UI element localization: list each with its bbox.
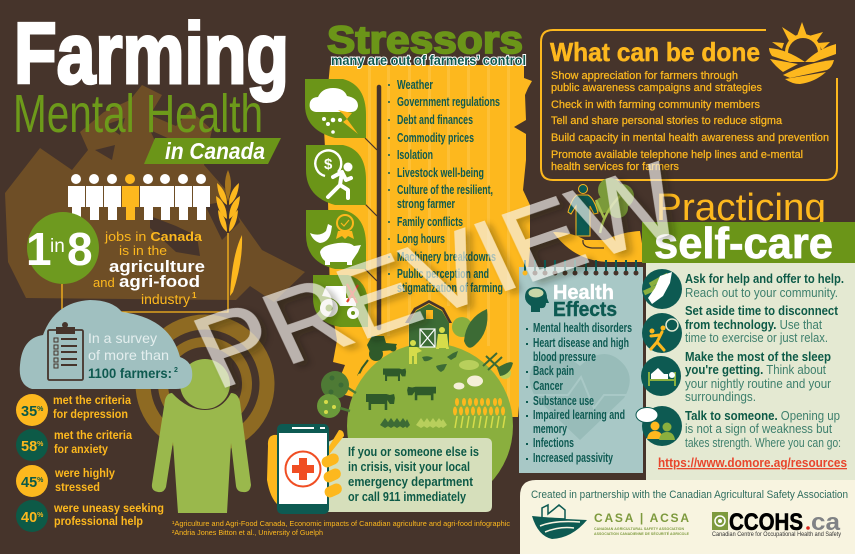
farmers [409,327,449,364]
panel: health effects: Back pain [533,363,574,378]
spiral binding [522,260,638,276]
logo: CASA: ASSOCIATION CANADIENNE DE SÉCURITÉ AGRICOLE [594,531,690,536]
stat: 45% stressed: 45 [21,475,37,491]
panel: health effects: Effects [553,299,617,321]
icon: wheat [216,170,242,296]
text: jobs in Canada: agriculture [109,257,205,276]
callout: crisis: in crisis, visit your local [348,459,470,474]
timeline bar [365,87,379,328]
stat: 40% uneasy: % [37,512,44,519]
panel: self-care tips: Talk to someone. Opening up [685,408,840,423]
icon leaf: livestock [306,210,366,269]
icon: clipboard [48,322,83,380]
stat: 1 in 8 circle: 8 [67,223,93,275]
footnotes: ¹Agriculture and Agri-Food Canada, Economic impacts of Canadian agriculture and agri-food infographic [172,519,510,528]
logo: CCOHS [712,509,842,538]
text: jobs in Canada: agri-food [119,272,200,291]
panel: self-care tips: you're getting. Think about [685,362,826,377]
text: jobs in Canada: and [93,275,115,290]
stat: 58% anxiety [16,428,132,461]
stressors list: Weather [397,77,433,92]
panel: health effects: Mental health disorders [533,320,632,335]
cows [366,369,436,410]
text: jobs in Canada: jobs in Canada [104,229,203,244]
stat: 45% stressed: stressed [55,480,100,494]
stressors list: Commodity prices [397,130,474,145]
panel: self-care tips: Make the most of the sleep [685,349,831,364]
footnotes [172,519,510,537]
panel: self-care tips: from technology. Use that [685,317,822,332]
map of Canada [5,85,305,302]
stat: 40% uneasy: professional help [54,514,143,528]
stat: 1 in 8 circle: 1 [26,223,52,275]
icon: head [525,287,549,312]
panel: health effects: Infections [533,435,574,450]
hill [347,343,513,509]
panel: partnership footer [520,480,855,554]
panel: what can be done: Check in with farming community members [551,99,760,111]
stat: 40% uneasy [16,500,164,532]
heart watermark [530,354,632,440]
text: jobs in Canada: 1 [192,291,197,300]
panel: health effects: Heart disease and high [533,335,629,350]
person silhouette [152,354,251,513]
small animals [422,351,483,390]
icon leaf: debt [306,145,366,205]
icon: exercise and clock [642,313,682,353]
panel: what can be done [541,30,837,180]
paper stripes [368,66,510,406]
stressors list: Livestock well-being [397,165,484,180]
panel: what can be done: Promote available telephone help lines and e-mental [551,149,803,161]
heading: Practicing: Practicing [656,187,826,229]
icon: helping hand [642,269,682,309]
icon: person and tree on hand [553,178,645,262]
panel: health effects: Increased passivity [533,450,614,465]
icon leaf: weather [305,79,366,138]
fence and leaf [474,348,513,379]
stressors list: Public perception and [397,266,489,281]
stressors list [388,77,503,295]
stat: 58% anxiety: met the criteria [54,428,132,442]
yellow outline box [62,233,228,312]
text: jobs in Canada: industry [141,292,190,307]
cloud: survey: In a survey [88,330,157,346]
callout: crisis: emergency department [348,474,474,489]
stressors list: Family conflicts [397,214,463,229]
corn field [453,398,505,428]
stressors list: Isolation [397,147,433,162]
panel: self-care tips: time to exercise or just relax. [685,330,828,345]
barn [405,300,452,347]
stat: 45% stressed [16,465,115,497]
logo: CASA [532,505,690,539]
watermark: PREVIEW: PREVIEW [177,142,700,411]
title: Mental Health: Mental Health [13,84,263,144]
tree [452,309,488,348]
logo: CCOHS: CCOHS [729,509,803,536]
stat: 45% stressed: were highly [54,466,115,480]
rings around head [143,322,267,446]
footnotes: ²Andria Jones Bitton et al., University of Guelph [172,528,323,537]
icon leaf: machinery [313,275,368,327]
panel: health effects: Health [553,282,614,304]
panel: health effects: memory [533,421,568,436]
icon leaf: debt: $ [324,156,333,173]
icon: sleep [641,356,681,396]
panel: self-care tips [636,263,855,481]
stat: 40% uneasy: 40 [21,510,37,526]
panel: health effects: Cancer [533,378,563,393]
cloud: survey: 1100 farmers: [88,365,172,381]
callout: crisis: or call 911 immediately [348,489,467,504]
yellow torn paper [324,65,532,417]
stat: 35% depression: for depression [53,407,128,421]
stressors list: Culture of the resilient, [397,182,493,197]
cloud: survey: 2 [174,367,178,374]
callout: crisis: If you or someone else is [348,444,479,459]
farm scene [317,300,513,509]
cloud: survey: of more than [88,347,169,363]
logo: CASA: CASA | ACSA [594,511,689,525]
stressors list: Machinery breakdowns [397,249,496,264]
stat: 35% depression: % [37,406,44,413]
orchard trees [317,371,356,418]
stressors list: Government regulations [397,94,500,109]
icon: talking people [636,406,682,446]
logo: CASA: CANADIAN AGRICULTURAL SAFETY ASSOCIATION [594,527,684,531]
panel: self-care tips: surroundings. [685,389,756,404]
heading: Stressors: Stressors [327,19,523,62]
panel: self-care tips: Reach out to your community. [685,285,838,300]
stressors list: Debt and finances [397,112,473,127]
panel: health effects: Substance use [533,393,594,408]
icon: sun over fields [769,22,836,84]
stat: 40% uneasy: were uneasy seeking [53,501,164,515]
panel: what can be done: Build capacity in mental health awareness and prevention [551,132,829,144]
stressors list: Long hours [397,231,445,246]
stat: 35% depression [16,393,131,426]
stressors list: strong farmer [397,196,455,211]
tractor [358,336,397,378]
banner: self-care: self-care [654,219,833,268]
icon: phone [277,424,329,514]
crop rows [380,418,447,428]
fingers [320,452,344,499]
panel: what can be done: public awareness campaigns and strategies [551,82,762,94]
stat: 58% anxiety: 58 [21,439,37,455]
panel: what can be done: Tell and share personal stories to reduce stigma [551,115,783,127]
stat: 45% stressed: % [37,477,44,484]
stressors list: stigmatization of farming [397,280,503,295]
panel: health effects [519,260,646,479]
banner: in Canada: in Canada [165,138,265,164]
callout: crisis [267,424,492,514]
stat: 58% anxiety: for anxiety [54,442,108,456]
panel: self-care tips: your nightly routine and your [685,376,832,391]
icon: row of eight people [68,174,210,220]
stat: 58% anxiety: % [37,441,44,448]
text: jobs in Canada: is in the [119,243,167,258]
title: Farming: Farming [14,6,289,102]
stat: 1 in 8 circle [26,212,99,284]
panel: what can be done: health services for farmers [551,161,679,173]
panel: what can be done: Show appreciation for farmers through [551,70,738,82]
cloud: survey [20,300,192,389]
stat: 35% depression: met the criteria [53,393,131,407]
panel: health effects: Impaired learning and [533,407,625,422]
logo: CCOHS: ca [811,509,841,536]
panel: what can be done: What can be done [550,37,760,67]
panel: health effects: blood pressure [533,349,596,364]
text: jobs in Canada [93,229,205,307]
hand behind phone [267,435,278,505]
stat: 1 in 8 circle: in [50,236,65,257]
subheading: many are out of farmers’ control [331,52,526,68]
stat: 35% depression: 35 [21,404,37,420]
panel: self-care tips: is not a sign of weakness but [685,421,832,436]
